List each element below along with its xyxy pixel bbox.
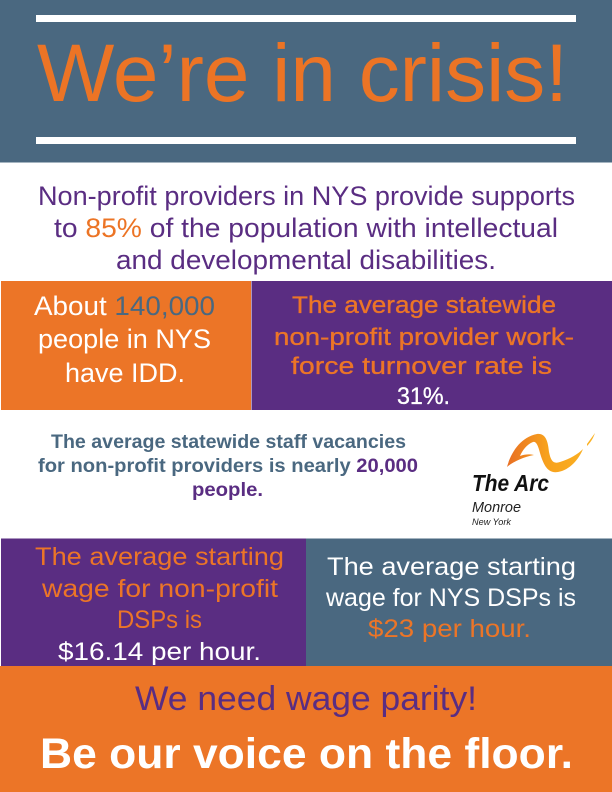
text: wage parity: We need wage parity!: [135, 680, 477, 718]
logo state: New York: [472, 517, 512, 528]
text block: staff vacancies: for non-profit providers is nearly 20,000: [38, 455, 418, 477]
panel: NYS starting wage: [306, 538, 612, 666]
panel: NYS starting wage: wage for NYS DSPs is: [325, 584, 576, 612]
text block: staff vacancies: The average statewide staff vacancies: [51, 431, 406, 453]
panel: turnover rate: 31%.: [397, 383, 450, 410]
panel: people with IDD: About 140,000: [34, 291, 215, 321]
panel: non-profit starting wage: [1, 538, 306, 666]
text block: providers statement: Non-profit providers in NYS provide supports: [38, 181, 575, 211]
panel: people with IDD: [1, 281, 251, 410]
panel: turnover rate: force turnover rate is: [291, 353, 552, 380]
text: be our voice: Be our voice on the floor.: [40, 730, 573, 778]
panel: non-profit starting wage: $16.14 per hour.: [58, 638, 261, 666]
logo location: Monroe: [472, 500, 521, 516]
panel: NYS starting wage: The average starting: [327, 553, 576, 581]
logo: The Arc Monroe New York: [472, 433, 595, 528]
panel: non-profit starting wage: DSPs is: [117, 606, 202, 634]
panel: people with IDD: people in NYS: [38, 324, 211, 354]
panel: non-profit starting wage: The average starting: [35, 543, 284, 571]
text block: providers statement: [38, 181, 575, 275]
panel: title header: [0, 0, 612, 162]
panel: turnover rate: The average statewide: [292, 292, 556, 319]
text block: providers statement: and developmental disabilities.: [116, 245, 496, 275]
text block: staff vacancies: people.: [192, 479, 263, 501]
panel: turnover rate: [252, 281, 612, 410]
panel: NYS starting wage: $23 per hour.: [368, 615, 531, 643]
text block: providers statement: to 85% of the population with intellectual: [54, 213, 558, 243]
panel: call to action: [0, 666, 612, 792]
logo wordmark: The Arc: [472, 470, 549, 496]
panel: people with IDD: have IDD.: [65, 358, 185, 388]
panel: turnover rate: non-profit provider work-: [274, 324, 574, 351]
text block: staff vacancies: [38, 431, 418, 501]
title: We’re in crisis!: [37, 28, 568, 119]
icon: arc swoosh: [507, 433, 595, 472]
panel: non-profit starting wage: wage for non-profit: [41, 575, 278, 603]
